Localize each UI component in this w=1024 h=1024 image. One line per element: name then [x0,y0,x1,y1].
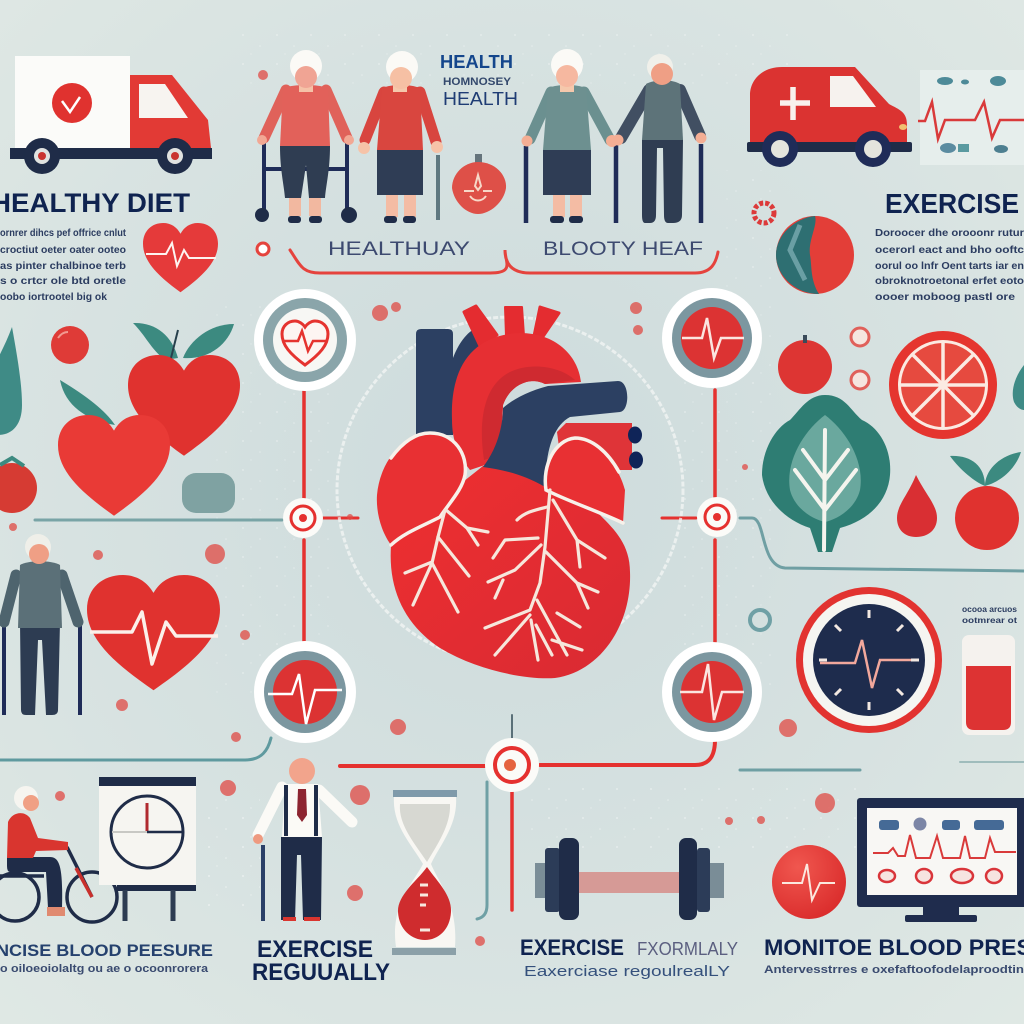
icon: red ecg ball [772,845,846,919]
title: health: HEALTH [443,89,518,109]
label: blooty heaf: BLOOTY HEAF [543,239,703,260]
text block: small right: ootmrear ot [962,616,1017,625]
small red accents [9,70,835,946]
icon: ambulance [747,67,912,167]
icon: small teal circle [750,610,770,630]
text block: monitor sub: Antervesstrres e oxefaftoofodelaproodtin [764,964,1024,976]
heading: monitor blood pressure: MONITOE BLOOD PRES [764,935,1024,960]
text block: exercise sub: Eaxerciase regoulrealLY [524,963,730,980]
heading: exercise: EXERCISE [885,188,1019,219]
icon: teal water drop [0,327,22,435]
node: bottom [485,738,539,792]
icon: monitor [857,798,1024,922]
node: right [697,497,737,537]
icon: red fruit [778,328,869,394]
title: health: HOMNOSEY [443,76,512,88]
text block: exercise body: oorul oo lnfr Oent tarts iar en [875,261,1024,272]
panel: ecg chart top right [918,70,1024,165]
text block: diet body: as pinter chalbinoe terb [0,261,126,272]
icon: tomato with leaves [950,452,1021,550]
text block: exercise body [875,228,1024,303]
heading: exercise regularly: EXERCISE [257,936,373,963]
heading: exercise formally: EXERCISE [520,935,624,960]
icon: blood glass [962,635,1015,735]
icon: teal and red ball [754,203,854,294]
text block: small right [962,605,1018,625]
dashed circle around heart [337,317,683,663]
central anatomical heart [377,306,643,678]
icon: elderly woman with walker [255,50,357,223]
text block: pressure sub: o oiloeoiolaltg ou ae o ocoonrorera [0,963,209,975]
icon: small ring [257,243,269,255]
text block: diet body: croctiut oeter oater ooteo [0,245,126,256]
title: health: HEALTH [440,52,513,72]
heading: exercise regularly [252,936,390,986]
text block: exercise body: obroknotroetonal erfet eoto [875,276,1024,287]
icon: circle ecg bottom right [662,642,762,742]
icon: person on bicycle [0,786,117,922]
text block: diet body: s o crtcr ole btd oretle [0,276,127,287]
icon: elderly man with canes [612,54,706,223]
icon: citrus slice [889,331,997,439]
label: healthuay: HEALTHUAY [328,239,470,260]
icon: small tomato left [0,458,37,513]
icon: hourglass [392,790,457,955]
node: left [283,498,323,538]
truck top left [10,56,212,174]
background speckles [200,30,860,910]
heading: exercise regularly: REGUUALLY [252,959,390,986]
icon: leafy vegetable [762,395,890,552]
icon: elderly woman in teal [522,49,618,223]
icon: red blood drop [897,475,937,537]
icon: big ecg heart [87,575,220,690]
heading: exercise formally [520,935,738,960]
icon: teal pill box [182,473,235,513]
text block: small right: ocooa arcuos [962,605,1018,614]
icon: circle ecg bottom left [254,641,356,743]
icon: teal drop right [1013,365,1024,410]
text block: diet body [0,228,127,303]
text block: diet body: oobo iortrootel big ok [0,292,107,303]
icon: gauge clock [796,587,942,733]
heading: concise blood pressure: NCISE BLOOD PEESURE [0,941,213,960]
icon: dumbbell [535,838,724,920]
icon: heart apples [58,323,240,516]
icon: circle heart [254,289,356,391]
icon: elderly man left [4,534,80,715]
heading: exercise formally: FXORMLALY [637,939,738,959]
text block: exercise body: oooer moboog pastl ore [875,292,1016,303]
icon: circle ecg top right [662,288,762,388]
icon: clock on easel [99,777,196,921]
title: health [440,52,518,109]
text block: exercise body: ocerorl eact and bho ooftc [875,245,1024,256]
icon: small apple [51,326,89,364]
text block: exercise body: Doroocer dhe orooonr rutur [875,228,1024,239]
icon: ecg heart small [143,223,218,292]
text block: diet body: ornrer dihcs pef offrice cnlut [0,228,127,239]
icon: elderly man with tie [253,758,352,921]
icon: apple medallion [452,154,506,214]
icon: elderly woman with cane [358,51,443,223]
connector lines [0,250,1024,919]
